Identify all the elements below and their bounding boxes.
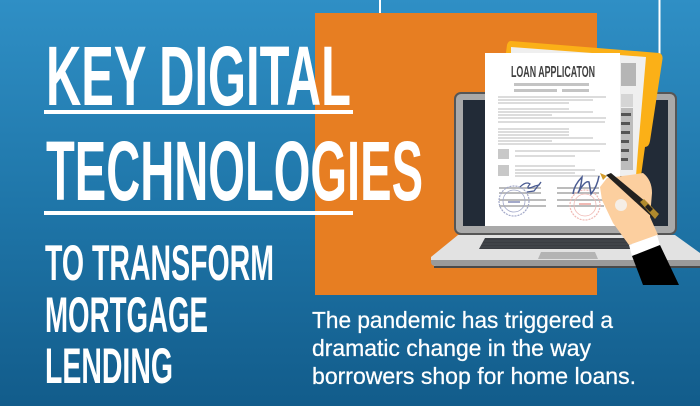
document text lines bbox=[498, 83, 606, 177]
title line 1: KEY DIGITAL bbox=[46, 29, 351, 123]
title underline 1 bbox=[44, 110, 353, 114]
title underline 2 bbox=[44, 211, 353, 215]
illustration: laptop with loan application bbox=[431, 41, 700, 285]
blue signature right bbox=[573, 176, 599, 194]
title block bbox=[46, 29, 423, 218]
body text: The pandemic has triggered a bbox=[312, 307, 613, 333]
subtitle bbox=[45, 235, 274, 394]
subtitle: TO TRANSFORM bbox=[45, 235, 274, 291]
signature lines bbox=[499, 187, 604, 207]
document title: LOAN APPLICATON bbox=[511, 64, 595, 81]
hand bbox=[600, 173, 658, 245]
suit sleeve bbox=[632, 245, 679, 285]
blue stamp bbox=[499, 186, 529, 216]
orange panel bbox=[315, 13, 597, 295]
shirt cuff bbox=[629, 235, 660, 256]
hand with pen bbox=[600, 173, 679, 285]
hanging line right bbox=[658, 0, 660, 56]
blue signature left bbox=[520, 182, 541, 192]
laptop screen bbox=[455, 93, 676, 234]
subtitle: LENDING bbox=[45, 338, 173, 394]
body text: dramatic change in the way bbox=[312, 335, 591, 361]
hanging line left bbox=[379, 0, 381, 13]
red stamp bbox=[570, 190, 600, 220]
loan application document bbox=[485, 53, 620, 226]
body text bbox=[312, 307, 636, 389]
finger highlight bbox=[615, 199, 627, 211]
body text: borrowers shop for home loans. bbox=[312, 363, 636, 389]
folder bbox=[505, 41, 663, 176]
subtitle: MORTGAGE bbox=[45, 287, 208, 343]
laptop base bbox=[431, 235, 700, 268]
title line 2: TECHNOLOGIES bbox=[46, 124, 423, 218]
pen bbox=[600, 173, 659, 219]
